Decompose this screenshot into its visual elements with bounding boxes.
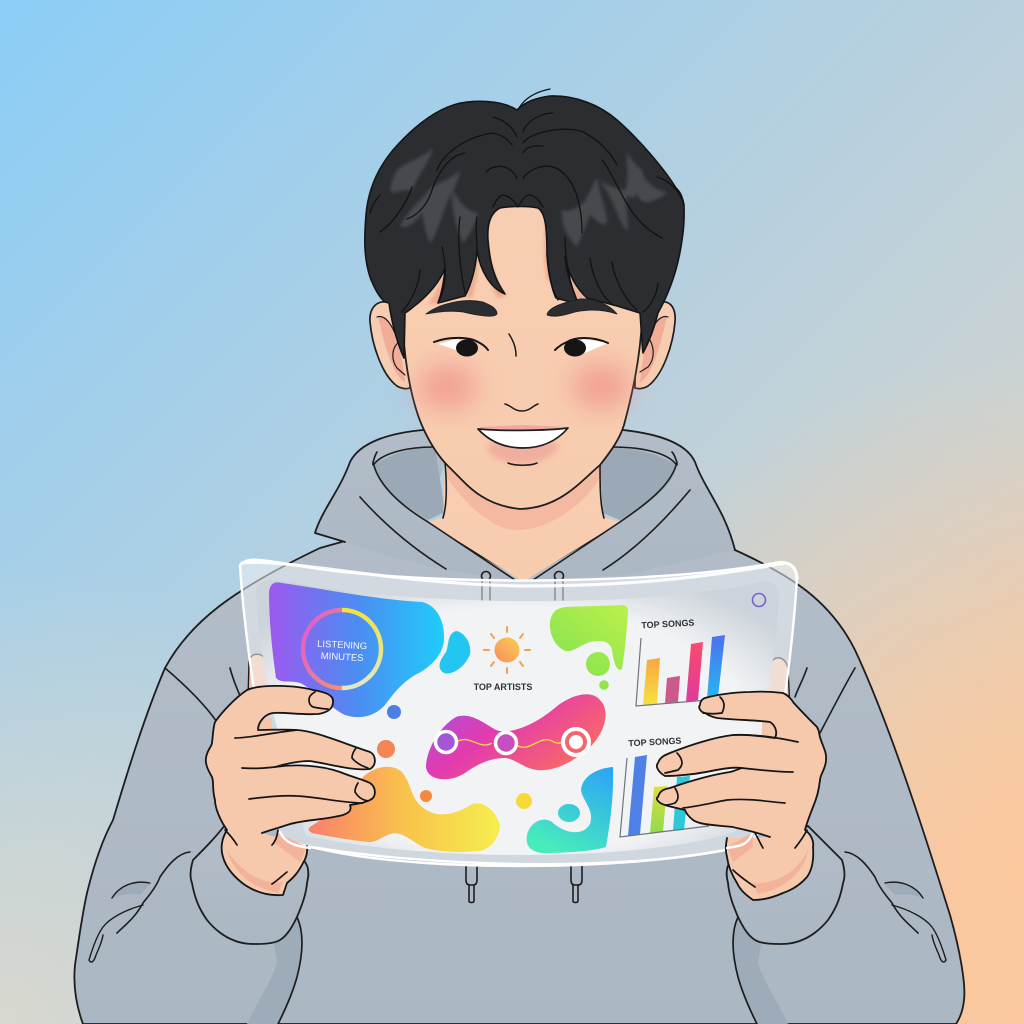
neck xyxy=(428,450,620,582)
tablet xyxy=(240,560,797,866)
left sleeve cuff xyxy=(191,825,308,944)
left hand xyxy=(206,686,375,895)
finger gap skin xyxy=(258,718,778,739)
hood xyxy=(315,430,735,580)
right wrist shading xyxy=(727,833,808,894)
drawstring eyelets and cords xyxy=(466,572,582,902)
mouth xyxy=(478,425,568,465)
glass body xyxy=(240,560,797,864)
icon: sun xyxy=(484,627,530,673)
screen xyxy=(256,580,779,855)
teal blob xyxy=(527,767,613,853)
person illustration xyxy=(74,89,964,1024)
right sleeve cuff xyxy=(727,826,844,944)
heading: top songs lower: TOP SONGS xyxy=(628,736,682,748)
green blob xyxy=(550,605,628,690)
timeline nodes xyxy=(436,727,591,757)
orange yellow blob xyxy=(309,767,500,852)
blush cheeks xyxy=(417,363,631,410)
hair xyxy=(365,89,684,358)
heading: top artists: TOP ARTISTS xyxy=(474,682,532,692)
bar chart lower xyxy=(620,755,709,837)
hair highlights xyxy=(391,148,667,247)
label: listening minutes xyxy=(317,639,367,664)
icon: status ring xyxy=(752,594,766,606)
panel: listening minutes blob xyxy=(269,582,444,717)
dots xyxy=(377,705,532,809)
label: listening minutes: LISTENING xyxy=(317,639,367,652)
nose xyxy=(505,334,538,411)
small cyan blob xyxy=(440,631,470,674)
ears xyxy=(370,300,675,389)
eyebrows xyxy=(426,299,617,316)
panel: wave timeline blob xyxy=(426,694,606,779)
heading: top songs upper: TOP SONGS xyxy=(641,618,695,630)
left wrist shading xyxy=(227,833,307,893)
eyes xyxy=(434,338,608,356)
bar chart upper xyxy=(636,635,725,706)
glass rim highlight xyxy=(241,562,797,586)
face xyxy=(403,190,642,509)
hoodie body xyxy=(74,520,964,1024)
hair strands xyxy=(370,89,684,312)
forehead hair shadow xyxy=(428,215,590,304)
ring: listening minutes xyxy=(303,610,381,688)
right hand xyxy=(657,692,826,900)
label: listening minutes: MINUTES xyxy=(320,651,364,664)
skin behind tablet xyxy=(248,654,790,710)
